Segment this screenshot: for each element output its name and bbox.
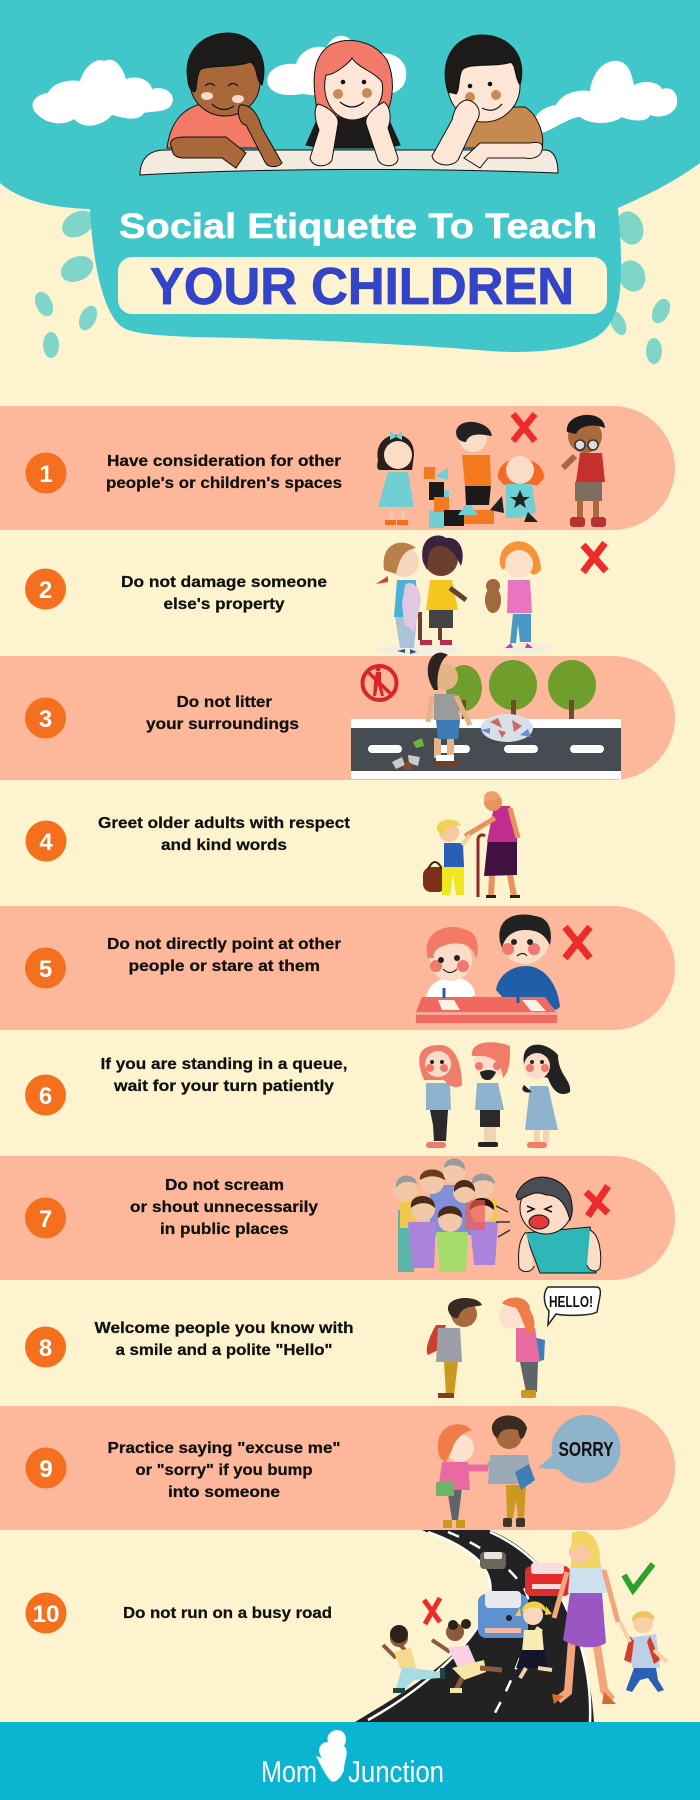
panel: item 10 (26, 1530, 667, 1722)
header: three children at table (140, 33, 558, 175)
title line 1: Social Etiquette To Teach (119, 207, 597, 246)
badge 10: 10 (32, 1601, 60, 1628)
illustration: boy greeting older woman (423, 791, 520, 898)
text 2 (121, 574, 327, 613)
text 5 (107, 936, 341, 975)
text 7: or shout unnecessarily (130, 1199, 318, 1216)
text 9 (108, 1440, 340, 1501)
footer logo (261, 1730, 444, 1789)
text 9: Practice saying "excuse me" (108, 1440, 340, 1457)
child: middle girl (306, 40, 400, 166)
badge 7 (25, 1198, 66, 1238)
text 7: in public places (160, 1221, 288, 1238)
logo mark (316, 1730, 347, 1782)
header: teal banner shape (0, 0, 700, 352)
badge 5 (25, 948, 66, 988)
illustration: children at desk (416, 915, 590, 1023)
badge 1 (26, 452, 66, 494)
illustration: children greeting: HELLO! (549, 1294, 593, 1311)
illustration: three people in queue (419, 1042, 570, 1148)
panel: item 9 (0, 1406, 675, 1530)
text 6: wait for your turn patiently (113, 1078, 334, 1095)
header: clouds (33, 36, 677, 133)
badge 4: 4 (39, 829, 53, 856)
text 7 (130, 1177, 318, 1238)
badge 10 (26, 1592, 66, 1634)
panel: item 8 (25, 1287, 600, 1398)
panel: item 5 (0, 906, 675, 1030)
panel: item 1 (0, 406, 675, 530)
text 2: Do not damage someone (121, 574, 327, 591)
footer logo: Junction (348, 1754, 444, 1789)
title pill (118, 257, 607, 314)
child: right boy (432, 35, 543, 168)
panel: item 3 (0, 653, 675, 780)
icon: no littering (362, 666, 396, 700)
badge 9 (26, 1448, 66, 1488)
illustration: busy road and children (355, 1530, 667, 1722)
text 1: people's or children's spaces (106, 475, 342, 492)
panel: item 7 (0, 1156, 675, 1280)
text 6: If you are standing in a queue, (100, 1056, 348, 1073)
text 10: Do not run on a busy road (123, 1605, 332, 1622)
text 7: Do not scream (165, 1177, 284, 1194)
badge 1: 1 (39, 461, 53, 488)
text 2: else's property (164, 596, 285, 613)
title (118, 207, 607, 316)
badge 9: 9 (39, 1456, 53, 1483)
text 5: Do not directly point at other (107, 936, 341, 953)
illustration: two children bumping (436, 1415, 620, 1528)
badge 7: 7 (39, 1206, 52, 1233)
text 8: Welcome people you know with (94, 1320, 354, 1337)
badge 8: 8 (39, 1335, 52, 1362)
illustration: children and blocks (377, 414, 606, 528)
badge 5: 5 (39, 956, 52, 983)
badge 3 (25, 698, 66, 738)
text 9: into someone (168, 1484, 280, 1501)
text 3 (146, 694, 299, 733)
badge 2 (25, 568, 66, 610)
text 4: and kind words (161, 837, 287, 854)
text 6 (100, 1056, 348, 1095)
badge 6 (25, 1074, 66, 1116)
header: droplets (31, 205, 674, 364)
logo text: Mom (261, 1754, 317, 1789)
badge 4 (26, 820, 66, 862)
text 1 (106, 453, 342, 492)
panel: item 4 (26, 791, 520, 898)
child: left boy (167, 33, 282, 168)
text 3: Do not litter (176, 694, 272, 711)
badge 8 (25, 1326, 66, 1368)
illustration: road, trees and littering boy (351, 653, 621, 779)
text 8 (94, 1320, 354, 1359)
panel: item 2 (25, 536, 606, 655)
text 8: a smile and a polite "Hello" (116, 1342, 332, 1359)
text 1: Have consideration for other (107, 453, 341, 470)
panel: item 6 (25, 1042, 570, 1148)
table (140, 150, 558, 175)
illustration: children and broken toy (376, 536, 606, 655)
illustration: two children bumping: SORRY (558, 1439, 614, 1461)
illustration: children greeting (427, 1287, 600, 1398)
title line 2: YOUR CHILDREN (150, 258, 574, 316)
footer band (0, 1722, 700, 1800)
text 5: people or stare at them (128, 958, 320, 975)
text 4: Greet older adults with respect (98, 815, 350, 832)
badge 6: 6 (39, 1083, 52, 1110)
illustration: crowd and shouting boy (393, 1158, 608, 1273)
text 9: or "sorry" if you bump (136, 1462, 312, 1479)
text 4 (98, 815, 350, 854)
text 3: your surroundings (146, 716, 299, 733)
badge 3: 3 (39, 706, 52, 733)
badge 2: 2 (39, 577, 52, 604)
